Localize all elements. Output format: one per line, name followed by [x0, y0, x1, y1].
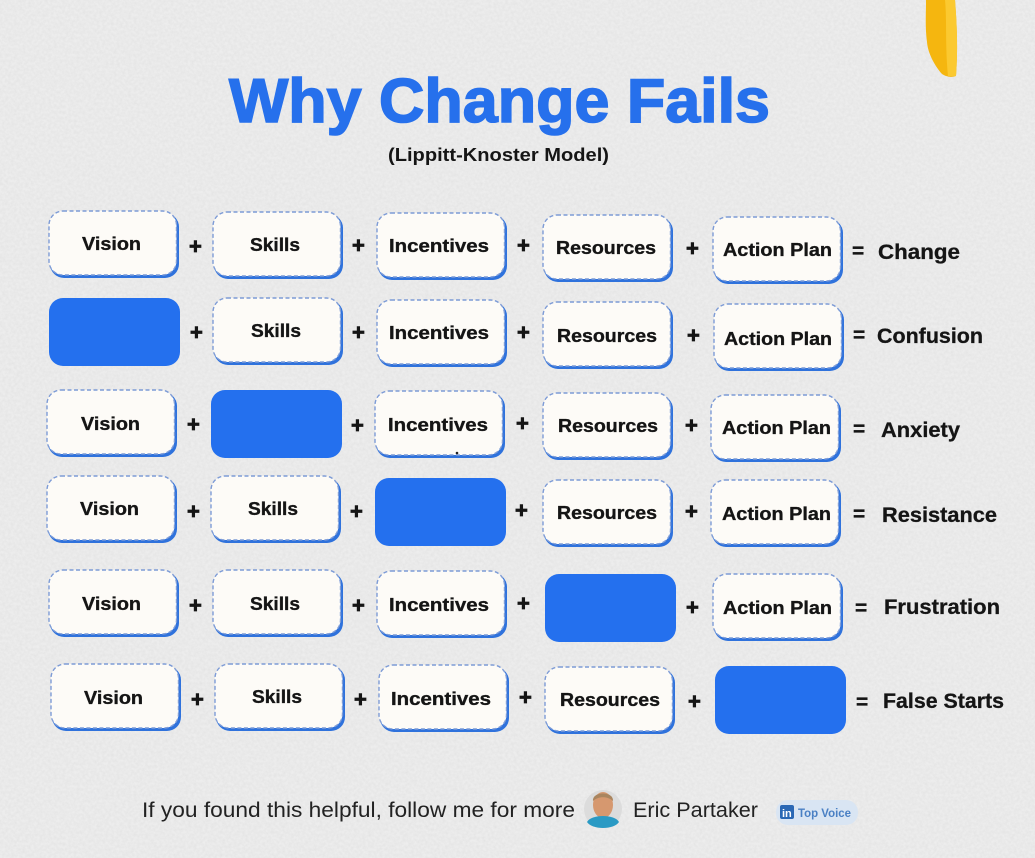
box: Resources — [543, 393, 673, 460]
box: Resources: Resources — [560, 690, 660, 710]
box: Vision: Vision — [82, 594, 141, 614]
plus: + — [189, 234, 202, 259]
box: Skills: Skills — [250, 594, 300, 614]
box: Action Plan: Action Plan — [723, 240, 832, 260]
box: Incentives: Incentives — [389, 236, 489, 256]
badge: LinkedIn Top Voice: Top Voice — [798, 806, 851, 820]
box: Resources: Resources — [558, 416, 658, 436]
badge: LinkedIn Top Voice — [776, 800, 858, 825]
box: Vision — [51, 664, 181, 731]
result: Change — [852, 240, 960, 264]
box: Skills: Skills — [248, 499, 298, 519]
plus: + — [685, 499, 698, 524]
box: Resources — [543, 215, 673, 282]
box: Incentives — [377, 571, 507, 638]
row 2: Confusion — [49, 298, 983, 371]
box: Resources: Resources — [556, 238, 656, 258]
box: Vision — [47, 390, 177, 457]
box: Skills — [213, 298, 343, 365]
box: Action Plan: Action Plan — [723, 598, 832, 618]
row 1: Change — [49, 211, 960, 284]
plus: + — [516, 411, 529, 436]
box: Resources: Resources — [557, 326, 657, 346]
plus: + — [350, 499, 363, 524]
plus: + — [515, 498, 528, 523]
box: Incentives — [377, 300, 507, 367]
result: Anxiety — [853, 418, 960, 442]
icon: yellow tape — [926, 0, 957, 77]
box: Incentives — [375, 391, 505, 458]
box: Vision — [47, 476, 177, 543]
plus: + — [686, 595, 699, 620]
result: False Starts: False Starts — [883, 690, 1004, 713]
result: Anxiety: = — [853, 418, 865, 441]
row 3: Anxiety — [47, 390, 960, 462]
plus: + — [517, 320, 530, 345]
result: Frustration: Frustration — [884, 596, 1000, 619]
box: Action Plan — [713, 217, 843, 284]
plus: + — [187, 499, 200, 524]
box: Skills: Skills — [251, 321, 301, 341]
icon: author avatar — [584, 790, 622, 828]
row 5: Frustration — [49, 570, 1000, 642]
box: Incentives — [377, 213, 507, 280]
box: Action Plan — [711, 395, 841, 462]
box: Action Plan: Action Plan — [724, 329, 832, 349]
plus: + — [190, 320, 203, 345]
box: Resources — [543, 302, 673, 369]
box: Incentives — [379, 665, 509, 732]
subtitle: (Lippitt-Knoster Model) — [388, 145, 609, 165]
plus: + — [189, 593, 202, 618]
box: Vision: Vision — [82, 234, 141, 254]
plus: + — [685, 413, 698, 438]
box: Action Plan: Action Plan — [722, 504, 831, 524]
plus: + — [519, 685, 532, 710]
box: Action Plan — [713, 574, 843, 641]
plus: + — [191, 687, 204, 712]
box: Resources — [543, 480, 673, 547]
plus: + — [351, 413, 364, 438]
plus: + — [187, 412, 200, 437]
plus: + — [352, 593, 365, 618]
missing box: Vision — [49, 298, 180, 366]
box: Vision: Vision — [80, 499, 139, 519]
plus: + — [686, 236, 699, 261]
box: Action Plan — [714, 304, 844, 371]
box: Skills: Skills — [252, 687, 302, 707]
box: Skills: Skills — [250, 235, 300, 255]
result: Confusion: Confusion — [877, 325, 983, 348]
box: Action Plan: Action Plan — [722, 418, 831, 438]
plus: + — [687, 323, 700, 348]
title: Why Change Fails — [229, 67, 770, 136]
box: Vision — [49, 211, 179, 278]
plus: + — [517, 591, 530, 616]
box: Incentives: Incentives — [389, 595, 489, 615]
plus: + — [517, 233, 530, 258]
missing box: Incentives — [375, 478, 506, 546]
footer call to action: If you found this helpful, follow me for more — [142, 798, 575, 822]
row 6: False Starts — [51, 664, 1004, 734]
box: Incentives: Incentives — [391, 689, 491, 709]
result: Change: Change — [878, 241, 960, 264]
author name: Eric Partaker — [633, 798, 758, 822]
box: Incentives: Incentives — [388, 415, 488, 435]
box: Incentives: Incentives — [389, 323, 489, 343]
box: Skills — [215, 664, 345, 731]
box: Vision — [49, 570, 179, 637]
badge: LinkedIn Top Voice: in — [782, 808, 792, 820]
row 4: Resistance — [47, 476, 997, 547]
result: Resistance: = — [853, 503, 865, 526]
plus: + — [352, 320, 365, 345]
missing box: Resources — [545, 574, 676, 642]
box: Action Plan — [711, 480, 841, 547]
box: Skills — [213, 570, 343, 637]
result: Change: = — [852, 240, 864, 263]
box: Skills — [213, 212, 343, 279]
plus: + — [688, 689, 701, 714]
missing box: Action Plan — [715, 666, 846, 734]
result: Frustration: = — [855, 597, 867, 620]
result: Anxiety: Anxiety — [881, 419, 960, 442]
result: False Starts: = — [856, 691, 868, 714]
box: Skills — [211, 476, 341, 543]
box: Resources: Resources — [557, 503, 657, 523]
result: Confusion: = — [853, 324, 865, 347]
missing box: Skills — [211, 390, 342, 458]
plus: + — [354, 687, 367, 712]
box: Resources — [545, 667, 675, 734]
result: Resistance: Resistance — [882, 504, 997, 527]
plus: + — [352, 233, 365, 258]
box: Vision: Vision — [81, 414, 140, 434]
box: Vision: Vision — [84, 688, 143, 708]
